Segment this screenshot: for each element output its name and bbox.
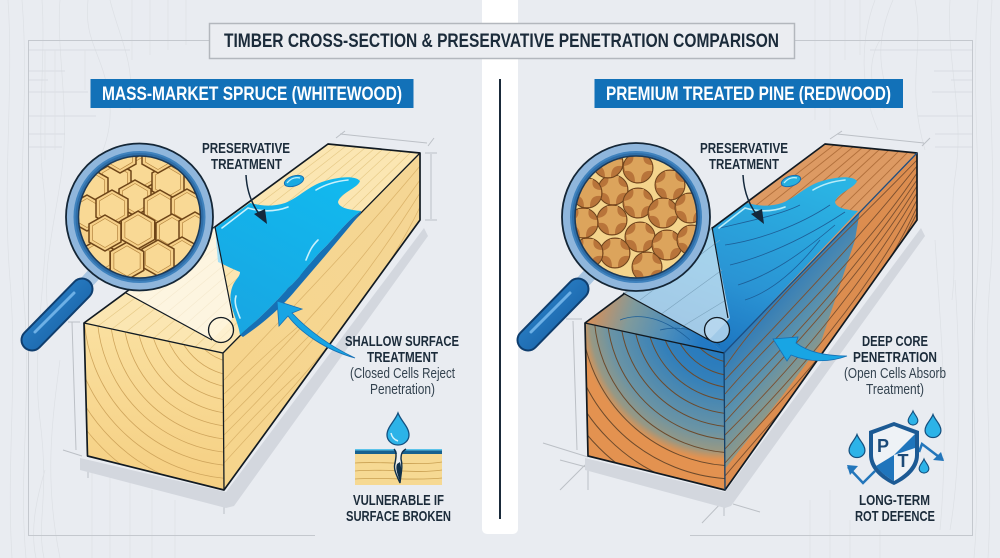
label: vulnerable if surface broken: SURFACE BROKEN	[346, 508, 451, 525]
magnifier lens: open porous cells	[562, 143, 710, 291]
magnifier cone	[126, 227, 234, 342]
heading: pine: PREMIUM TREATED PINE (REDWOOD)	[606, 84, 891, 105]
arrow: shallow surface	[277, 301, 355, 358]
heading: spruce: MASS-MARKET SPRUCE (WHITEWOOD)	[102, 84, 402, 105]
icon: water drop on cracked surface	[355, 413, 442, 485]
label: deep core penetration: PENETRATION	[853, 349, 937, 366]
label: shallow surface treatment: SHALLOW SURFACE	[345, 333, 459, 350]
title box	[210, 24, 794, 58]
title box: TIMBER CROSS-SECTION & PRESERVATIVE PENETRATION COMPARISON	[224, 30, 779, 52]
label: shallow surface treatment	[345, 333, 459, 398]
central white divider band	[482, 0, 518, 534]
beam: pine timber	[585, 145, 925, 508]
beam: spruce timber	[80, 143, 428, 508]
arrow: deep core	[773, 337, 847, 361]
label: preservative treatment	[700, 140, 788, 173]
dimension lines	[63, 131, 437, 514]
label: vulnerable if surface broken: VULNERABLE IF	[353, 492, 444, 509]
beam outline: pine	[585, 144, 917, 490]
icon: shield with drops: P	[877, 436, 889, 456]
label: long-term rot defence: ROT DEFENCE	[855, 508, 935, 525]
label: preservative treatment: TREATMENT	[211, 156, 282, 173]
heading: pine	[594, 79, 903, 108]
label: long-term rot defence	[855, 492, 935, 525]
preservative liquid: deep	[585, 173, 858, 353]
panel: premium treated pine	[528, 79, 946, 525]
label: shallow surface treatment: Penetration)	[370, 381, 435, 398]
dimension lines	[543, 131, 930, 523]
label: deep core penetration: DEEP CORE	[862, 333, 928, 350]
icon: shield with drops	[847, 411, 944, 485]
label: preservative treatment: PRESERVATIVE	[700, 140, 788, 157]
label: deep core penetration: (Open Cells Absorb	[844, 365, 946, 382]
magnifier handle	[32, 272, 96, 340]
label: deep core penetration	[844, 333, 946, 398]
central divider line	[499, 79, 501, 519]
label: preservative treatment	[202, 140, 290, 173]
label: shallow surface treatment: TREATMENT	[367, 349, 438, 366]
label: shallow surface treatment: (Closed Cells Reject	[350, 365, 456, 382]
magnifier handle	[528, 272, 592, 340]
magnifier cone	[623, 227, 730, 342]
preservative liquid: shallow	[215, 173, 361, 337]
heading: spruce	[90, 79, 414, 108]
arrow: preservative treatment	[743, 175, 764, 224]
label: deep core penetration: Treatment)	[866, 381, 924, 398]
magnifier lens: closed hexagonal cells	[66, 137, 213, 298]
label: preservative treatment: TREATMENT	[709, 156, 779, 173]
label: preservative treatment: PRESERVATIVE	[202, 140, 290, 157]
panel: mass-market spruce	[32, 79, 459, 525]
label: long-term rot defence: LONG-TERM	[859, 492, 930, 509]
icon: shield with drops: T	[898, 451, 908, 471]
arrow: preservative treatment	[246, 175, 267, 224]
label: vulnerable if surface broken	[346, 492, 451, 525]
